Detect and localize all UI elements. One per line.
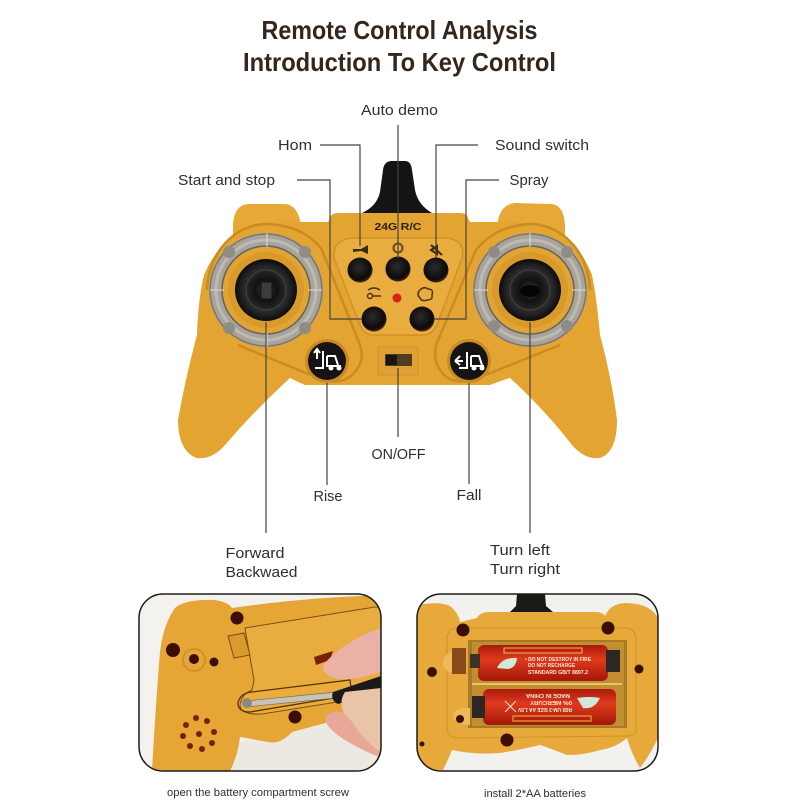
title: Introduction To Key Control	[243, 47, 556, 77]
compartment cover	[240, 607, 381, 714]
photo frame	[417, 594, 658, 771]
callout lines	[266, 125, 530, 533]
icon: spray	[418, 288, 432, 301]
label: Fall: Fall	[456, 487, 482, 504]
title	[243, 15, 556, 77]
remote controller	[178, 203, 617, 458]
fall button	[447, 339, 491, 383]
right joystick	[474, 233, 586, 347]
divider	[472, 683, 622, 685]
remote back	[417, 603, 658, 771]
right ridge	[435, 224, 590, 381]
right shoulder bump	[497, 203, 565, 240]
bottom battery	[472, 689, 616, 725]
bottom battery: MADE IN CHINA	[526, 692, 570, 698]
label: Turn left Turn right	[490, 542, 561, 578]
label: Forward Backwaed	[226, 545, 298, 581]
title: Remote Control Analysis	[262, 15, 538, 45]
label: Turn left Turn right: Turn left	[490, 542, 551, 559]
holes	[420, 622, 644, 746]
inner recess	[447, 628, 636, 738]
bottom battery: R6B UM-3 SIZE AA 1.5V	[518, 706, 572, 712]
left ridge	[207, 224, 362, 381]
top battery	[470, 645, 620, 681]
slot	[314, 651, 333, 665]
label: Rise: Rise	[314, 488, 342, 505]
panel: open battery compartment photo	[139, 594, 381, 771]
icon: horn	[353, 245, 368, 254]
label: Forward Backwaed: Forward	[226, 545, 284, 562]
fingers	[323, 628, 381, 679]
auto demo button	[386, 256, 410, 282]
label: Forward Backwaed: Backwaed	[226, 564, 298, 581]
panel label: 2.4G R/C: 24G R/C	[374, 221, 422, 233]
label: Spray: Spray	[510, 172, 549, 189]
icon: auto demo	[394, 244, 402, 252]
label: Auto demo: Auto demo	[361, 102, 438, 119]
top battery: DO NOT RECHARGE	[528, 663, 575, 669]
start stop button	[362, 306, 386, 332]
label: Horn: Hom	[278, 137, 312, 154]
latch slots	[443, 651, 452, 672]
top battery: STANDARD GB/T 8897.2	[528, 670, 588, 676]
left joystick	[210, 233, 322, 347]
top battery: • DO NOT DESTROY IN FIRE	[525, 657, 591, 663]
holes	[166, 612, 302, 724]
rise button	[305, 339, 349, 383]
antenna base	[510, 594, 553, 612]
icon: sound switch	[431, 245, 442, 255]
controller body	[178, 213, 617, 458]
label: ON/OFF: ON/OFF	[372, 446, 426, 463]
caption: open the battery compartment screw: open the battery compartment screw	[167, 787, 349, 799]
icon: antenna	[362, 161, 432, 213]
remote back	[152, 595, 381, 771]
spray button	[410, 306, 434, 332]
screwdriver	[246, 692, 336, 707]
caption: install 2*AA batteries: install 2*AA batteries	[484, 788, 587, 800]
label: Start and stop: Start and stop	[178, 172, 275, 189]
red LED	[392, 294, 402, 302]
sound switch button	[424, 258, 448, 282]
left shoulder bump	[233, 204, 301, 240]
label: Sound switch: Sound switch	[495, 137, 589, 154]
icon: start and stop	[368, 288, 381, 298]
photo frame	[139, 594, 381, 771]
center plate	[334, 238, 463, 335]
shadow under remote	[230, 723, 378, 770]
bottom battery: 0% MERCURY	[530, 699, 572, 705]
clip tab	[228, 633, 250, 658]
speaker holes	[180, 715, 217, 752]
horn button	[348, 258, 372, 282]
compartment	[468, 640, 627, 728]
label: Turn left Turn right: Turn right	[490, 561, 561, 578]
power switch	[378, 347, 418, 375]
panel: install batteries photo	[417, 594, 658, 771]
